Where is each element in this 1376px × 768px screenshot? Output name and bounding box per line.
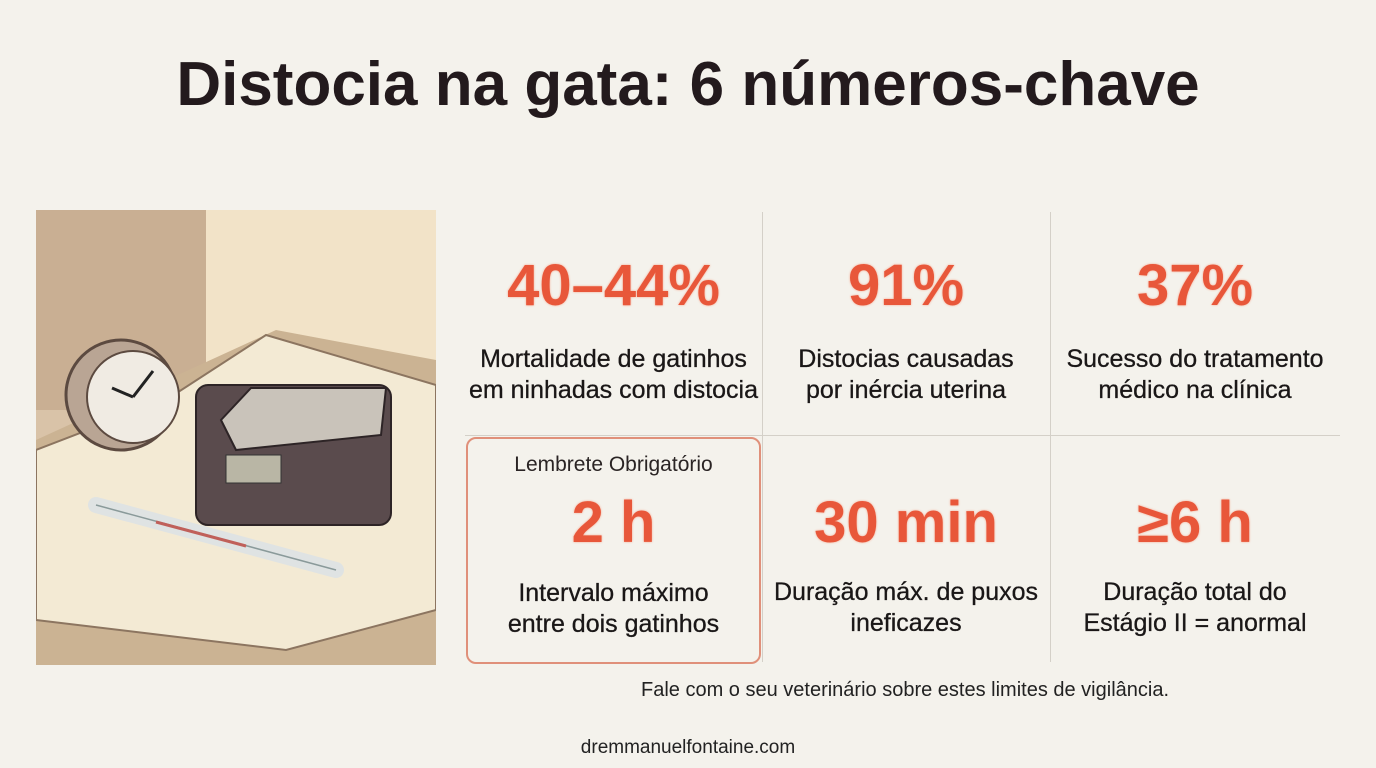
stat 4 highlighted reminder: entre dois gatinhos — [508, 610, 719, 638]
stat 4 highlighted reminder: Lembrete Obrigatório — [514, 453, 713, 476]
illustration: clock, scale, thermometer — [36, 210, 436, 665]
stat 1 — [469, 253, 758, 404]
stat 6 — [1083, 490, 1307, 637]
source url: dremmanuelfontaine.com — [581, 737, 795, 758]
stat 1: 40–44% — [507, 253, 720, 318]
stat 1: Mortalidade de gatinhos — [480, 345, 747, 373]
stat 3: médico na clínica — [1098, 376, 1292, 404]
stat 4 highlighted reminder: 2 h — [572, 490, 655, 555]
stat 6: Estágio II = anormal — [1083, 609, 1307, 637]
stat 3: Sucesso do tratamento — [1066, 345, 1324, 373]
footer note: Fale com o seu veterinário sobre estes limites de vigilância. — [641, 679, 1169, 701]
stat 2 — [798, 253, 1014, 404]
stat 3: 37% — [1137, 253, 1253, 318]
stat 4 highlighted reminder — [466, 437, 761, 664]
stat 1: em ninhadas com distocia — [469, 376, 758, 404]
stat 5: Duração máx. de puxos — [774, 578, 1038, 606]
stat 2: Distocias causadas — [798, 345, 1014, 373]
title: Distocia na gata: 6 números-chave — [176, 50, 1200, 119]
stat 5: 30 min — [814, 490, 998, 555]
stat 3 — [1066, 253, 1324, 404]
stat 6: ≥6 h — [1137, 490, 1253, 555]
stat 2: 91% — [848, 253, 964, 318]
grid dividers — [762, 212, 763, 662]
stat 6: Duração total do — [1103, 578, 1287, 606]
stat 5 — [774, 490, 1038, 637]
stat 5: ineficazes — [850, 609, 962, 637]
stat 4 highlighted reminder: Intervalo máximo — [518, 579, 709, 607]
stat 2: por inércia uterina — [806, 376, 1006, 404]
